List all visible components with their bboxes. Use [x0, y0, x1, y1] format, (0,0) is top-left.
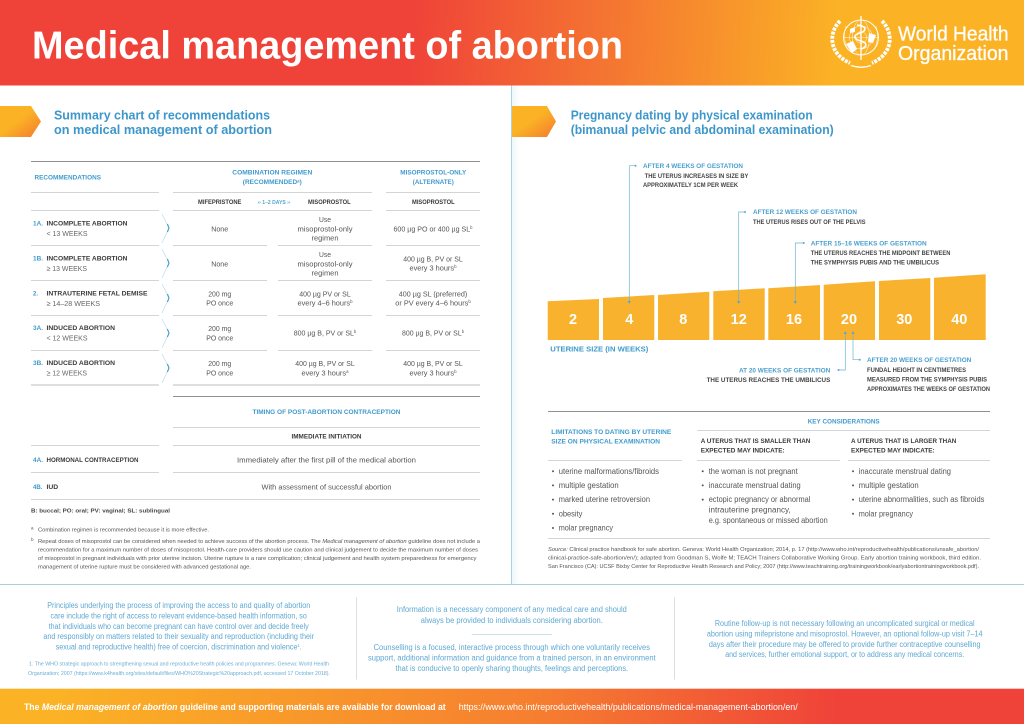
callout: after 12 weeks	[737, 209, 866, 304]
row 1B	[33, 249, 463, 278]
table column headers: COMBINATION REGIMEN	[232, 170, 313, 177]
column: limitations: multiple gestation	[559, 481, 619, 490]
row 1B: misoprostol-only	[298, 259, 353, 268]
axis label: UTERINE SIZE (IN WEEKS)	[550, 344, 649, 353]
table column headers: RECOMMENDATIONS	[34, 175, 102, 182]
callout: after 20 weeks: AFTER 20 WEEKS OF GESTATION	[867, 357, 972, 364]
row 4A: 4A.	[33, 457, 43, 464]
table column headers: MISOPROSTOL	[412, 199, 455, 206]
row 4A	[33, 455, 416, 464]
text block: information and counselling: Counselling is a focused, interactive process through which one voluntarily receives	[374, 643, 650, 652]
row 2: every 4–6 hours	[298, 299, 352, 308]
callout: after 4 weeks	[628, 163, 749, 304]
footnotes	[31, 526, 481, 571]
contraception timing table: TIMING OF POST-ABORTION CONTRACEPTION	[252, 409, 401, 416]
column: limitations: LIMITATIONS TO DATING BY UTERINE	[551, 429, 672, 436]
callout: after 15-16 weeks: THE UTERUS REACHES THE MIDPOINT BETWEEN	[811, 250, 951, 257]
heading: (bimanual pelvic and abdominal examination)	[571, 122, 834, 137]
callout: after 12 weeks: THE UTERUS RISES OUT OF THE PELVIS	[753, 219, 866, 226]
logo wordmark	[898, 23, 1008, 65]
row 2: 400 µg SL (preferred)	[399, 289, 468, 298]
footnotes: b	[31, 537, 34, 542]
row 1B: ≥ 13 WEEKS	[46, 264, 87, 273]
source note: San Francisco (CA): UCSF Bixby Center for Reproductive Health Research and Policy; 2007 (http://www.teachtraining.org/trainingworkbook/earlyabortiontrainingworkbook.pdf).	[548, 564, 979, 570]
column: larger uterus: EXPECTED MAY INDICATE:	[851, 448, 935, 454]
row 3A	[33, 319, 464, 348]
title: Medical management of abortion	[32, 24, 623, 67]
callout: after 4 weeks: AFTER 4 WEEKS OF GESTATION	[643, 163, 743, 170]
table column headers: MIFEPRISTONE	[198, 199, 242, 206]
row 3B: every 3 hours	[410, 368, 456, 377]
column: limitations	[551, 429, 672, 532]
row 3B: INDUCED ABORTION	[46, 360, 115, 367]
callout: after 15-16 weeks	[794, 240, 951, 304]
row 1A: b	[470, 225, 473, 230]
column: limitations: obesity	[559, 509, 582, 518]
column: smaller uterus: EXPECTED MAY INDICATE:	[701, 448, 785, 454]
contraception timing table	[31, 396, 480, 500]
row 2: INTRAUTERINE FETAL DEMISE	[46, 291, 148, 298]
footer banner	[0, 689, 1024, 724]
arrow marker	[512, 106, 556, 137]
arrow marker	[0, 106, 41, 137]
source note: clinical-practice-safe-abortion/en/); adapted from Goodman S, Wolfe M; TEACH Trainers Collaborative Working Group. Early abortion training workbook, third edition.	[548, 556, 981, 562]
bar values: 4	[625, 312, 633, 328]
column: limitations: marked uterine retroversion	[559, 495, 650, 504]
row 1B: b	[454, 264, 457, 269]
row 1A	[33, 214, 473, 243]
row 3B: 3B.	[33, 360, 43, 367]
heading: Summary chart of recommendations	[54, 108, 270, 123]
row 3A: PO once	[206, 333, 233, 342]
text block: principles: sexual and reproductive health) free of coercion, discrimination and violence	[56, 642, 322, 651]
bar values	[569, 312, 967, 328]
row 3B: 200 mg	[208, 359, 231, 368]
text block: principles: Organization; 2007 (https://www.k4health.org/sites/default/files/WHO%20Strategic%20approach.pdf, accessed 17 October 2018).	[28, 671, 330, 677]
table column headers: a	[297, 178, 300, 183]
bar values: 40	[951, 312, 967, 328]
heading	[571, 108, 834, 137]
heading: Pregnancy dating by physical examination	[571, 108, 813, 123]
row 1A: regimen	[312, 234, 338, 243]
column: larger uterus: A UTERUS THAT IS LARGER THAN	[851, 438, 957, 445]
row 4B: IUD	[46, 484, 58, 491]
footnotes: recommendation for a maximum number of doses of misoprostol. Health-care providers should use caution and clinical judgement to decide the maximum number of doses	[38, 548, 478, 554]
contraception timing table: IMMEDIATE INITIATION	[292, 434, 362, 441]
callout: after 12 weeks: AFTER 12 WEEKS OF GESTATION	[753, 209, 857, 216]
text block: principles: that individuals who can become pregnant can have control over and decide freely	[49, 622, 309, 631]
text block: information and counselling: that is conducive to openly sharing thoughts, feelings and perceptions.	[395, 664, 628, 673]
row 2: or PV every 4–6 hours	[395, 299, 471, 308]
heading	[54, 108, 272, 137]
row 1A: Use	[319, 215, 331, 224]
row 4A: HORMONAL CONTRACEPTION	[46, 457, 139, 464]
bar values: 30	[896, 312, 912, 328]
logo wordmark: Organization	[898, 42, 1008, 65]
source note: Source: Clinical practice handbook for safe abortion. Geneva: World Health Organization; 2014, p. 17 (http://www.who.int/reproductivehealth/publications/unsafe_abortion/	[548, 547, 979, 553]
row 1A: misoprostol-only	[298, 224, 353, 233]
header banner	[0, 0, 1024, 86]
row 1A: INCOMPLETE ABORTION	[46, 221, 128, 228]
callout: after 20 weeks: FUNDAL HEIGHT IN CENTIMETRES	[867, 367, 967, 374]
callout: at 20 weeks: AT 20 WEEKS OF GESTATION	[739, 368, 831, 374]
recommendations table	[31, 162, 480, 385]
source note	[548, 547, 981, 570]
row 1B: Use	[319, 250, 331, 259]
column: smaller uterus: inaccurate menstrual dating	[709, 481, 801, 490]
row 4A: Immediately after the first pill of the medical abortion	[237, 455, 416, 464]
WHO logo	[832, 16, 1008, 67]
text block: principles: .	[300, 642, 302, 651]
table column headers: )	[300, 179, 302, 186]
text block: information and counselling	[368, 605, 656, 673]
column: larger uterus	[851, 438, 984, 518]
text block: follow-up: Routine follow-up is not necessary following an uncomplicated surgical or medical	[715, 619, 975, 628]
row 3B: 400 µg B, PV or SL	[295, 359, 355, 368]
row 2: ≥ 14–28 WEEKS	[46, 299, 100, 308]
text block: principles: and responsibly on matters related to their sexuality and reproduction (including their	[43, 632, 314, 641]
bar values: 8	[679, 312, 687, 328]
column: larger uterus: molar pregnancy	[859, 509, 913, 518]
callout: after 4 weeks: APPROXIMATELY 1CM PER WEEK	[643, 182, 738, 189]
text block: information and counselling: always be provided to individuals considering abortion.	[421, 616, 603, 625]
row 3B: every 3 hours	[302, 368, 348, 377]
footnotes: Combination regimen is recommended because it is more effective.	[38, 528, 209, 534]
row 3B: a	[346, 369, 349, 374]
table column headers: MISOPROSTOL	[308, 199, 351, 206]
logo wordmark: World Health	[898, 23, 1008, 46]
callout: after 20 weeks	[851, 331, 990, 393]
text block: principles: care include the right of access to relevant evidence-based health information, so	[51, 612, 307, 620]
text block: information and counselling: support, additional information and guidance from a trained person, in an environment	[368, 654, 656, 662]
callout: after 4 weeks: THE UTERUS INCREASES IN SIZE BY	[645, 173, 749, 180]
text block: principles: 1. The WHO strategic approach to strengthening sexual and reproductive health policies and programmes. Geneva: World Health	[29, 662, 329, 668]
footnotes: a	[31, 526, 34, 530]
bar values: 20	[841, 312, 857, 328]
row 3A: b	[462, 329, 464, 334]
row 1B: every 3 hours	[410, 264, 456, 273]
footnotes: of misoprostol in pregnant individuals with prior uterine incision. Uterine rupture is a rare complication; clinical judgement and health system preparedness for emergency	[38, 556, 477, 562]
row 4B: With assessment of successful abortion	[262, 482, 392, 491]
bars	[548, 274, 986, 340]
column: limitations: uterine malformations/fibroids	[559, 467, 659, 476]
key considerations table: KEY CONSIDERATIONS	[808, 418, 880, 426]
text block: follow-up: abortion using mifepristone and misoprostol. However, an optional follow-up visit 7–14	[707, 630, 983, 638]
heading: on medical management of abortion	[54, 122, 272, 137]
panel: pregnancy dating by physical examination	[512, 106, 990, 570]
text block: principles: 1	[297, 643, 300, 648]
row 2: 400 µg PV or SL	[299, 289, 351, 298]
row 3A: 800 µg B, PV or SL	[294, 329, 359, 338]
table column headers	[34, 170, 467, 206]
row 3B: PO once	[206, 368, 233, 377]
row 1B: None	[211, 259, 228, 268]
download note: The Medical management of abortion guideline and supporting materials are available for download at	[24, 702, 446, 712]
bar chart: uterine size in weeks	[548, 274, 986, 353]
column: larger uterus: uterine abnormalities, such as fibroids	[859, 495, 984, 504]
row 1B: regimen	[312, 269, 338, 278]
row 1A: 1A.	[33, 221, 43, 228]
callout: after 15-16 weeks: THE SYMPHYSIS PUBIS AND THE UMBILICUS	[811, 259, 940, 266]
callout: at 20 weeks	[707, 331, 847, 384]
text block: follow-up: days after their procedure may be offered to provide further contraceptive counselling	[709, 640, 981, 649]
text block: principles: Principles underlying the process of improving the access to and quality of abortion	[47, 601, 310, 610]
icon: WHO emblem	[832, 16, 890, 67]
column: smaller uterus: ectopic pregnancy or abnormal	[709, 495, 811, 504]
column: limitations: SIZE ON PHYSICAL EXAMINATION	[551, 438, 660, 445]
row 3A: INDUCED ABORTION	[46, 325, 115, 332]
row 4B	[33, 482, 392, 491]
row 3B: b	[454, 369, 457, 374]
abbreviations key: B: buccal; PO: oral; PV: vaginal; SL: sublingual	[31, 508, 170, 514]
row 3A: 200 mg	[208, 324, 231, 333]
bar values: 16	[786, 312, 802, 328]
row 1A: 600 µg PO or 400 µg SL	[394, 224, 476, 233]
row 3B: ≥ 12 WEEKS	[46, 368, 87, 378]
text block: follow-up	[707, 619, 983, 659]
text block: principles	[28, 601, 330, 677]
download link: https://www.who.int/reproductivehealth/publications/medical-management-abortion/en/	[459, 702, 798, 712]
row 2: b	[468, 299, 471, 304]
row 1B: 1B.	[33, 256, 43, 263]
table column headers: ›› 1–2 DAYS ››	[258, 200, 291, 206]
table column headers: (RECOMMENDED	[243, 179, 298, 186]
footnotes: management of uterine rupture must be considered with advanced gestational age.	[38, 565, 251, 571]
row 1B: INCOMPLETE ABORTION	[46, 256, 128, 263]
bar values: 12	[731, 312, 747, 328]
row 2: 200 mg	[208, 289, 231, 298]
row 3B: 400 µg B, PV or SL	[403, 359, 463, 368]
bar values: 2	[569, 312, 577, 328]
column: larger uterus: multiple gestation	[859, 481, 919, 490]
column: smaller uterus	[701, 438, 828, 525]
row 3A: b	[354, 329, 357, 334]
column: smaller uterus: A UTERUS THAT IS SMALLER THAN	[701, 438, 811, 445]
callout: after 15-16 weeks: AFTER 15–16 WEEKS OF GESTATION	[811, 240, 927, 247]
text block: information and counselling: Information is a necessary component of any medical care and should	[397, 605, 627, 614]
row 2: b	[350, 299, 353, 304]
panel: summary chart of recommendations	[0, 106, 481, 571]
table column headers: MISOPROSTOL-ONLY	[400, 170, 467, 177]
table column headers: (ALTERNATE)	[413, 179, 454, 186]
row 1B: 400 µg B, PV or SL	[403, 254, 463, 263]
callout: at 20 weeks: THE UTERUS REACHES THE UMBILICUS	[707, 377, 831, 384]
callout: after 20 weeks: APPROXIMATES THE WEEKS OF GESTATION	[867, 386, 990, 393]
row 4B: 4B.	[33, 484, 43, 491]
column: smaller uterus: intrauterine pregnancy,	[709, 506, 791, 514]
row 1A: < 13 WEEKS	[46, 229, 88, 238]
column: larger uterus: inaccurate menstrual dating	[859, 467, 951, 476]
row 2	[33, 284, 471, 313]
callout: after 20 weeks: MEASURED FROM THE SYMPHYSIS PUBIS	[867, 376, 988, 383]
row 2: 2.	[33, 291, 38, 298]
row 3A: 3A.	[33, 325, 43, 332]
footnotes: Repeat doses of misoprostol can be considered when needed to achieve success of the abortion process. The Medical management of abortion guideline does not include a	[38, 539, 481, 545]
key considerations table	[548, 412, 990, 538]
row 3A: < 12 WEEKS	[46, 334, 88, 342]
column: smaller uterus: the woman is not pregnant	[709, 467, 799, 476]
column: smaller uterus: e.g. spontaneous or missed abortion	[709, 516, 828, 525]
text block: follow-up: and services, further emotional support, or to address any medical concerns.	[725, 650, 964, 659]
row 3B	[33, 354, 463, 383]
row 1A: None	[211, 224, 228, 233]
row 3A: 800 µg B, PV or SL	[402, 329, 467, 338]
column: limitations: molar pregnancy	[559, 524, 613, 532]
row 2: PO once	[206, 299, 233, 308]
